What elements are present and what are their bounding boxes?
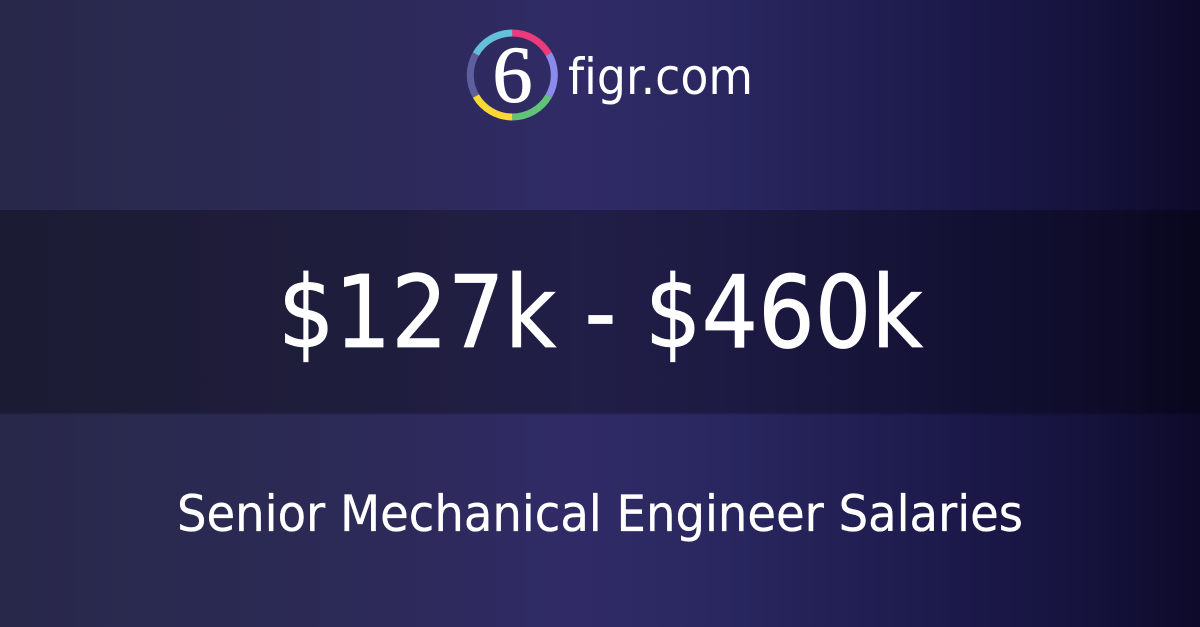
logo: 6figr.com	[470, 32, 753, 120]
icon: six-colour ring	[470, 33, 554, 117]
salary range: $127k - $460k	[278, 254, 923, 371]
job title: Senior Mechanical Engineer Salaries	[177, 485, 1023, 543]
wordmark: figr.com	[568, 48, 753, 106]
dark price band	[0, 210, 1200, 415]
icon: numeral six: 6	[492, 32, 532, 120]
